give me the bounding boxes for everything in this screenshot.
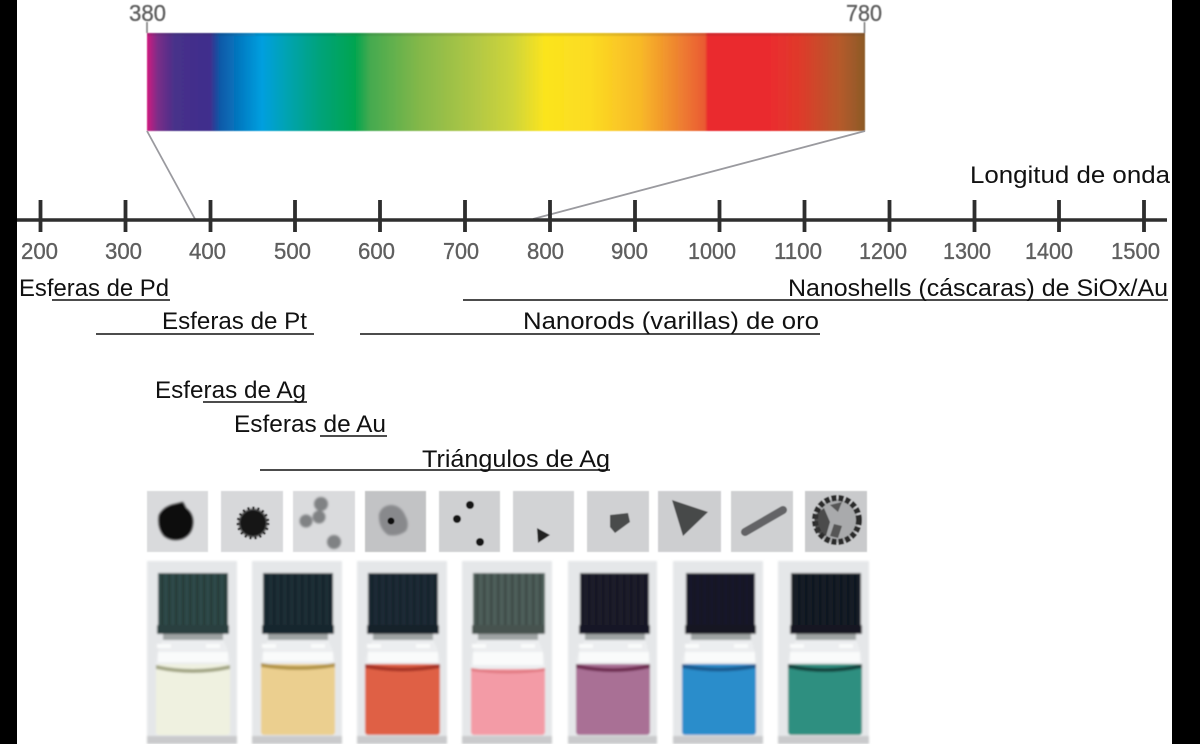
axis numbers: 500 [274,238,311,264]
vial 3: red-orange [357,561,447,744]
thumb: rough sphere [221,491,283,552]
axis numbers: 1100 [774,238,822,264]
vial 4: pink [462,561,552,744]
axis numbers: 600 [358,238,395,264]
axis title: Longitud de onda [970,162,1170,189]
thumb: medium triangle [587,491,649,552]
vial photographs [147,561,869,744]
visible spectrum bar [129,0,882,131]
thumb: core-shell sphere [365,491,426,552]
axis numbers: 200 [21,238,58,264]
axis numbers: 900 [611,238,648,264]
axis numbers: 800 [527,238,564,264]
zoom connector lines [147,131,865,219]
axis numbers: 1000 [688,238,736,264]
vial 2: yellow [252,561,342,744]
thumb: large sphere [147,491,208,552]
axis numbers: 300 [105,238,142,264]
axis numbers: 1300 [943,238,991,264]
thumb: small dots [439,491,500,552]
vial 5: purple [568,561,657,744]
range: Triángulos de Ag: Triángulos de Ag [422,446,610,473]
axis numbers: 1200 [859,238,907,264]
label: 380: 380 [129,0,166,26]
thumb: small triangle [513,491,574,552]
range: Esferas de Ag: Esferas de Ag [155,377,306,404]
label: 780: 780 [846,0,882,26]
axis numbers: 1400 [1025,238,1073,264]
range: Nanorods: Nanorods (varillas) de oro [523,308,819,335]
axis numbers [21,238,1160,264]
thumb: gray spheres [293,491,355,552]
micrograph thumbnails [147,491,867,552]
thumb: nanorod [731,491,793,552]
axis numbers: 400 [189,238,226,264]
thumb: nanoshell [805,491,867,552]
thumb: large triangle [658,491,721,552]
axis numbers: 700 [443,238,479,264]
axis numbers: 1500 [1111,238,1160,264]
range: Nanoshells: Nanoshells (cáscaras) de SiOx/Au [788,275,1168,302]
range: Esferas de Au: Esferas de Au [234,411,386,438]
wavelength axis [17,200,1167,232]
range: Esferas de Pd: Esferas de Pd [19,275,169,302]
vial 1: pale yellow-white [147,561,237,744]
vial 7: teal [778,561,869,744]
vial 6: blue [673,561,763,744]
range: Esferas de Pt: Esferas de Pt [162,308,307,335]
